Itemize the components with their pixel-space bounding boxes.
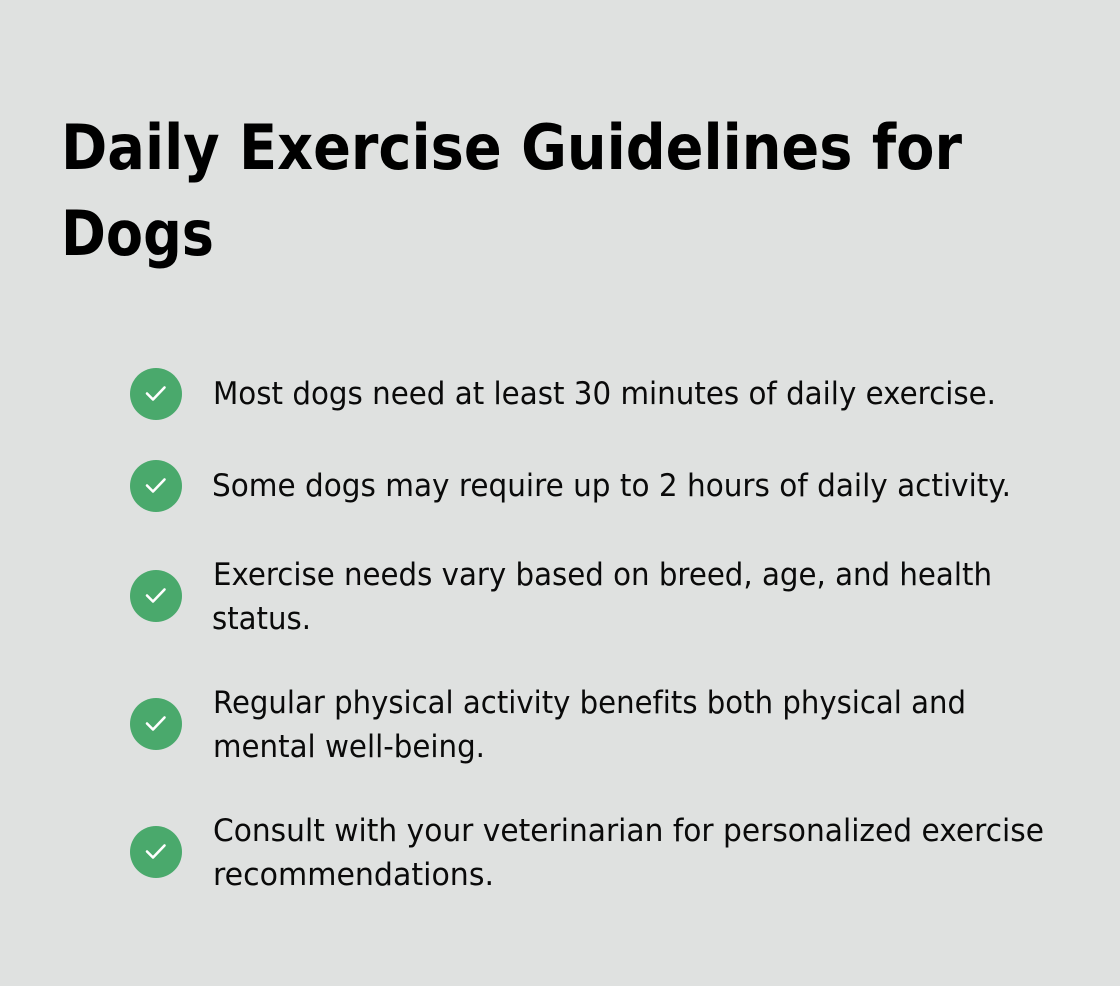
item 4: Regular physical activity benefits both physical and [213,685,966,721]
title: Daily Exercise Guidelines for [61,111,962,184]
item 5: recommendations. [213,857,494,893]
title: Dogs [61,197,214,270]
item 3: status. [212,601,311,637]
item 2: Some dogs may require up to 2 hours of daily activity. [212,468,1011,504]
item 3 [130,557,992,637]
item 4: mental well-being. [213,729,485,765]
checklist [130,368,1044,893]
item 5: Consult with your veterinarian for personalized exercise [213,813,1044,849]
title [61,111,962,270]
item 2 [130,460,1011,512]
item 3: Exercise needs vary based on breed, age, and health [213,557,992,593]
item 1: Most dogs need at least 30 minutes of daily exercise. [213,376,996,412]
item 1 [130,368,996,420]
item 4 [130,685,966,765]
item 5 [130,813,1044,893]
